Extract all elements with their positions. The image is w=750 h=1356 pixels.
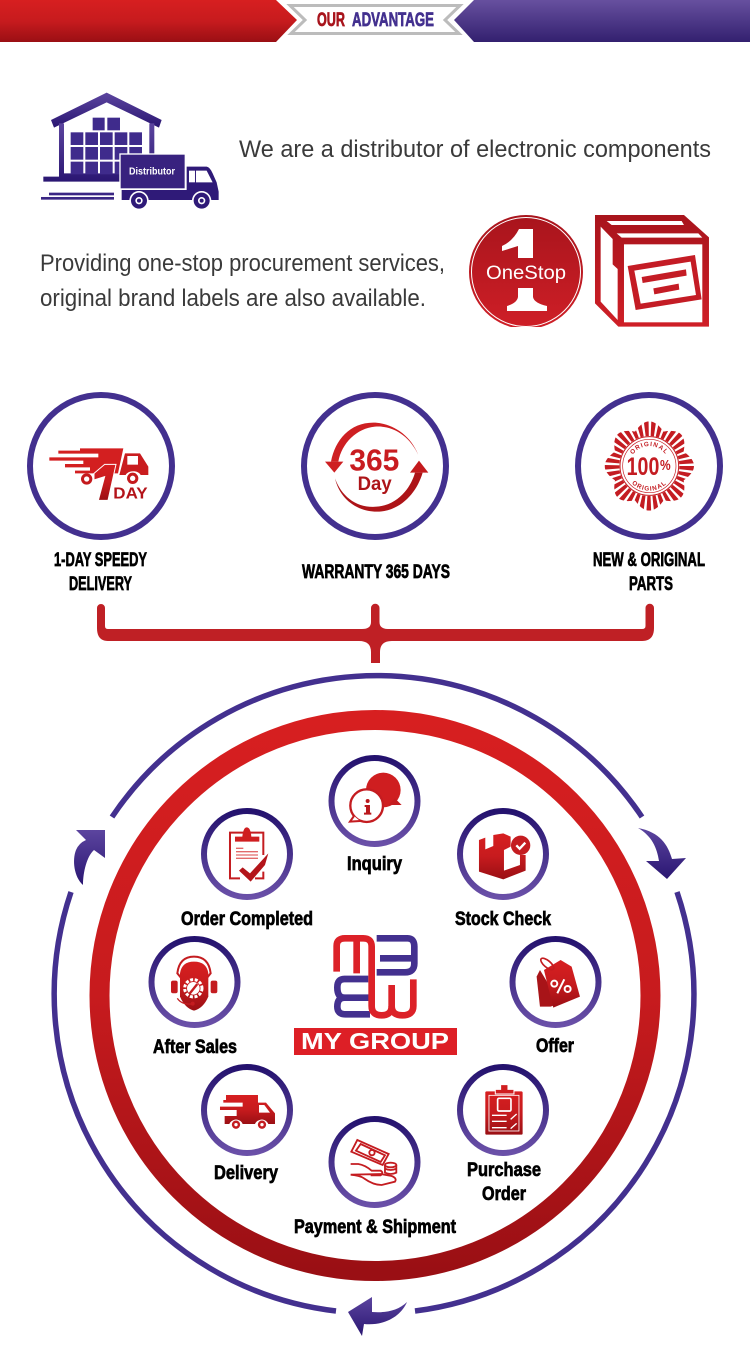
label: Stock Check bbox=[455, 909, 551, 930]
text: distributor statement: We are a distributor of electronic components bbox=[239, 136, 711, 163]
red ring bbox=[100, 720, 650, 1271]
title bbox=[317, 10, 434, 31]
outer purple cycle ring bbox=[54, 676, 694, 1311]
icon: hand with money bbox=[351, 1140, 396, 1185]
red banner band bbox=[0, 0, 297, 42]
icon: 100% original seal: ORIGINAL bbox=[632, 481, 666, 491]
text: one-stop procurement bbox=[40, 250, 445, 312]
panel: 1-day speedy delivery bbox=[30, 395, 172, 595]
label: DELIVERY bbox=[69, 574, 132, 595]
icon: 100% original seal: % bbox=[660, 458, 671, 474]
label: PARTS bbox=[629, 574, 673, 595]
icon: one stop badge: OneStop bbox=[486, 263, 566, 284]
step: delivery bbox=[204, 1067, 290, 1184]
panel: new and original parts bbox=[575, 392, 723, 595]
label: Order bbox=[482, 1184, 527, 1205]
text: one-stop procurement: Providing one-stop procurement services, bbox=[40, 250, 445, 277]
logo plate bbox=[294, 1028, 457, 1055]
step ring bbox=[152, 939, 238, 1025]
icon: speeding truck: DAY bbox=[113, 485, 148, 502]
step: order completed bbox=[181, 811, 313, 930]
badge ring bbox=[30, 395, 172, 537]
step ring bbox=[512, 939, 598, 1025]
label: Offer bbox=[536, 1036, 574, 1057]
icon: 365 day arrows: 365 bbox=[349, 444, 399, 478]
step: stock check bbox=[455, 811, 551, 930]
icon: 100% original seal: 100 bbox=[627, 453, 659, 481]
step ring bbox=[460, 1067, 546, 1153]
header banner bbox=[0, 0, 750, 42]
logo: MBEW my group bbox=[294, 938, 457, 1055]
arrow: top right bbox=[638, 828, 686, 879]
icon: headset support bbox=[171, 957, 217, 1011]
step: after sales bbox=[152, 939, 238, 1058]
icon: price tags bbox=[537, 956, 580, 1008]
label: Inquiry bbox=[347, 854, 402, 875]
label: Delivery bbox=[214, 1163, 278, 1184]
ribbon badge bbox=[290, 6, 460, 34]
step: offer bbox=[512, 939, 598, 1057]
icon: speeding truck bbox=[49, 448, 148, 502]
label bbox=[593, 550, 705, 595]
label bbox=[54, 550, 147, 595]
arrow: bottom bbox=[348, 1297, 407, 1336]
process cycle bbox=[54, 676, 694, 1336]
icon: box with tick bbox=[479, 833, 530, 879]
icon: clipboard bbox=[485, 1085, 523, 1135]
icon: 365 day arrows: Day bbox=[358, 474, 392, 495]
label: NEW & ORIGINAL bbox=[593, 550, 705, 571]
badge ring bbox=[304, 395, 446, 537]
step ring bbox=[204, 1067, 290, 1153]
badge ring bbox=[578, 395, 720, 537]
label: WARRANTY 365 DAYS bbox=[302, 562, 450, 583]
label: Order Completed bbox=[181, 909, 313, 930]
text: one-stop procurement: original brand labels are also available. bbox=[40, 285, 426, 312]
icon: one stop badge bbox=[469, 215, 583, 329]
icon: speech bubbles bbox=[350, 773, 402, 822]
step ring bbox=[460, 811, 546, 897]
icon: warehouse and distributor truck: Distributor bbox=[129, 166, 175, 177]
icon: packaging box bbox=[595, 215, 709, 327]
label: 1-DAY SPEEDY bbox=[54, 550, 147, 571]
step: payment and shipment bbox=[294, 1119, 457, 1238]
logo name: MY GROUP bbox=[301, 1028, 449, 1054]
label bbox=[467, 1160, 541, 1205]
arrow: left bbox=[74, 830, 105, 885]
step ring bbox=[204, 811, 290, 897]
icon: delivery van bbox=[220, 1095, 275, 1129]
panel: warranty 365 days bbox=[302, 395, 450, 583]
icon: 365 day arrows bbox=[325, 423, 428, 512]
icon: warehouse and distributor truck bbox=[41, 93, 219, 210]
bracket connector bbox=[97, 604, 654, 663]
label: Purchase bbox=[467, 1160, 541, 1181]
purple banner band bbox=[454, 0, 750, 42]
title: OUR bbox=[317, 10, 345, 31]
logo mark bbox=[337, 938, 414, 1015]
icon: 100% original seal bbox=[604, 422, 694, 511]
icon: 100% original seal: ORIGINAL bbox=[630, 442, 667, 454]
step: inquiry bbox=[332, 758, 418, 875]
step ring bbox=[332, 1119, 418, 1205]
icon: clipboard with check bbox=[230, 827, 268, 882]
label: After Sales bbox=[153, 1037, 237, 1058]
step: purchase order bbox=[460, 1067, 546, 1205]
title: ADVANTAGE bbox=[352, 10, 434, 31]
label: Payment & Shipment bbox=[294, 1217, 457, 1238]
step ring bbox=[332, 758, 418, 844]
